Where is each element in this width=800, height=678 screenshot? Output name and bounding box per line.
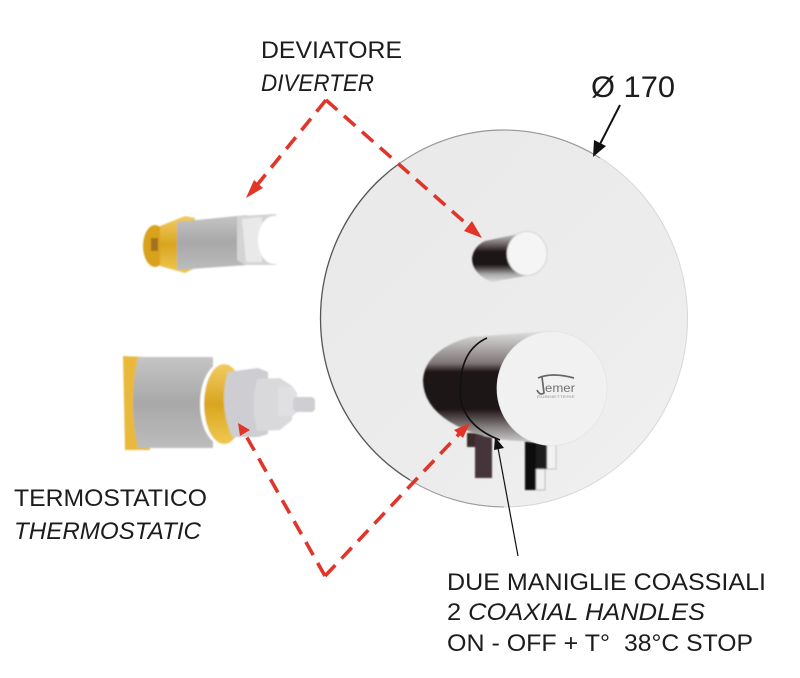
wall plate disc: [320, 130, 688, 507]
arrow to coaxial handle: [325, 423, 470, 576]
label: termostatico: TERMOSTATICO: [14, 485, 207, 512]
label: coaxial handles: 38°C STOP: [624, 630, 753, 657]
diverter knob on plate: [472, 232, 547, 282]
label: coaxial handles: ON - OFF + T°: [447, 630, 610, 657]
label: termostatico: [14, 485, 207, 545]
logo: Remer: [537, 375, 575, 399]
label: coaxial handles: [447, 569, 766, 657]
arrow to diverter cartridge: [246, 100, 326, 198]
red dashed arrows: [238, 100, 482, 576]
diverter cartridge: [143, 214, 290, 273]
arrow: coaxial handles: [494, 437, 518, 556]
thermostatic cartridge: [123, 356, 315, 450]
label: termostatico: THERMOSTATIC: [14, 518, 202, 545]
arrow: diameter: [593, 105, 620, 157]
label: coaxial handles: DUE MANIGLIE COASSIALI: [447, 569, 766, 596]
label: diameter: Ø 170: [591, 71, 675, 104]
logo: Remer: RUBINETTERIE: [537, 394, 575, 399]
label: coaxial handles: 2 COAXIAL HANDLES: [447, 599, 705, 626]
arrow to diverter knob: [326, 100, 482, 238]
label: deviatore: [261, 37, 402, 97]
label: deviatore: DIVERTER: [261, 70, 374, 97]
arrow to thermostatic cartridge: [238, 423, 325, 576]
label: deviatore: DEVIATORE: [261, 37, 402, 64]
coaxial thermostatic handle with logo: [423, 331, 607, 446]
lower levers: [467, 433, 556, 490]
logo: Remer: emer: [545, 381, 575, 395]
